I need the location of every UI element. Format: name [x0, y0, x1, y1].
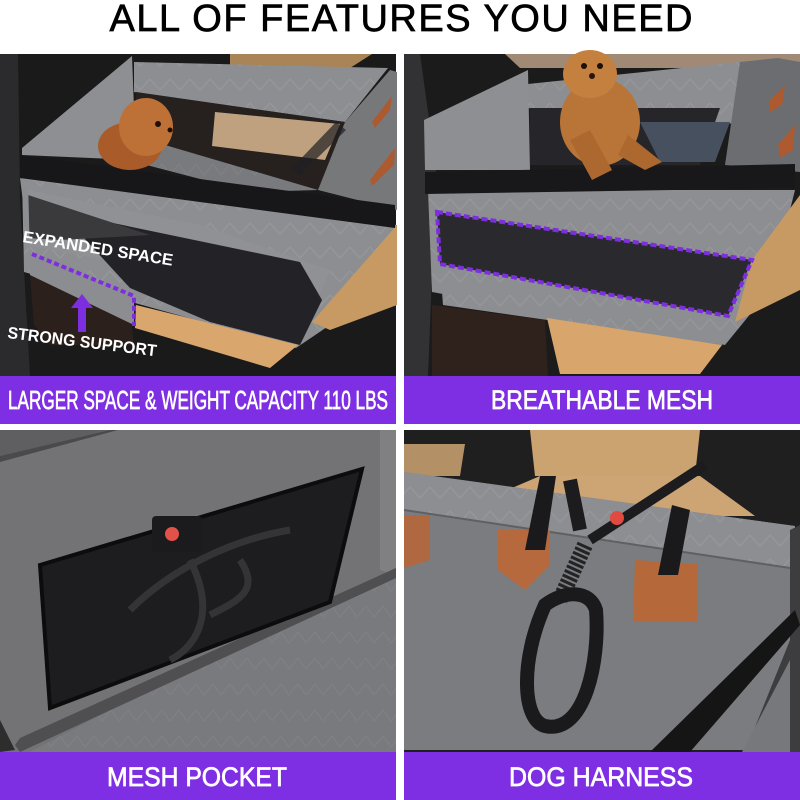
caption bar: dog harness: DOG HARNESS	[509, 762, 693, 792]
icon: harness with bungee leash	[527, 465, 705, 727]
caption bar: breathable mesh	[404, 376, 800, 424]
icon: poodle lying in seat	[98, 98, 173, 170]
caption bar: breathable mesh: BREATHABLE MESH	[491, 385, 713, 415]
caption bar: larger space: LARGER SPACE & WEIGHT CAPACITY 110 LBS	[8, 385, 388, 415]
caption bar: dog harness	[404, 752, 800, 800]
caption bar: mesh pocket	[0, 752, 396, 800]
arrow: purple up	[71, 294, 93, 332]
icon: leather strap tabs	[498, 476, 698, 622]
label: expanded space: EXPANDED SPACE	[21, 228, 174, 270]
icon: buckle and strap	[152, 516, 202, 552]
dashed highlight: mesh window	[437, 212, 752, 316]
panel: mesh pocket photo	[0, 430, 396, 752]
panel: larger space photo	[0, 54, 397, 376]
icon: poodle standing	[560, 50, 662, 180]
dashed highlight: expanded space	[32, 254, 134, 326]
panel: dog harness photo	[404, 430, 800, 752]
label: strong support: STRONG SUPPORT	[7, 324, 158, 360]
panel: breathable mesh photo	[404, 54, 800, 376]
caption bar: larger space	[0, 376, 396, 424]
caption bar: mesh pocket: MESH POCKET	[107, 762, 287, 792]
mesh pocket	[40, 469, 362, 708]
